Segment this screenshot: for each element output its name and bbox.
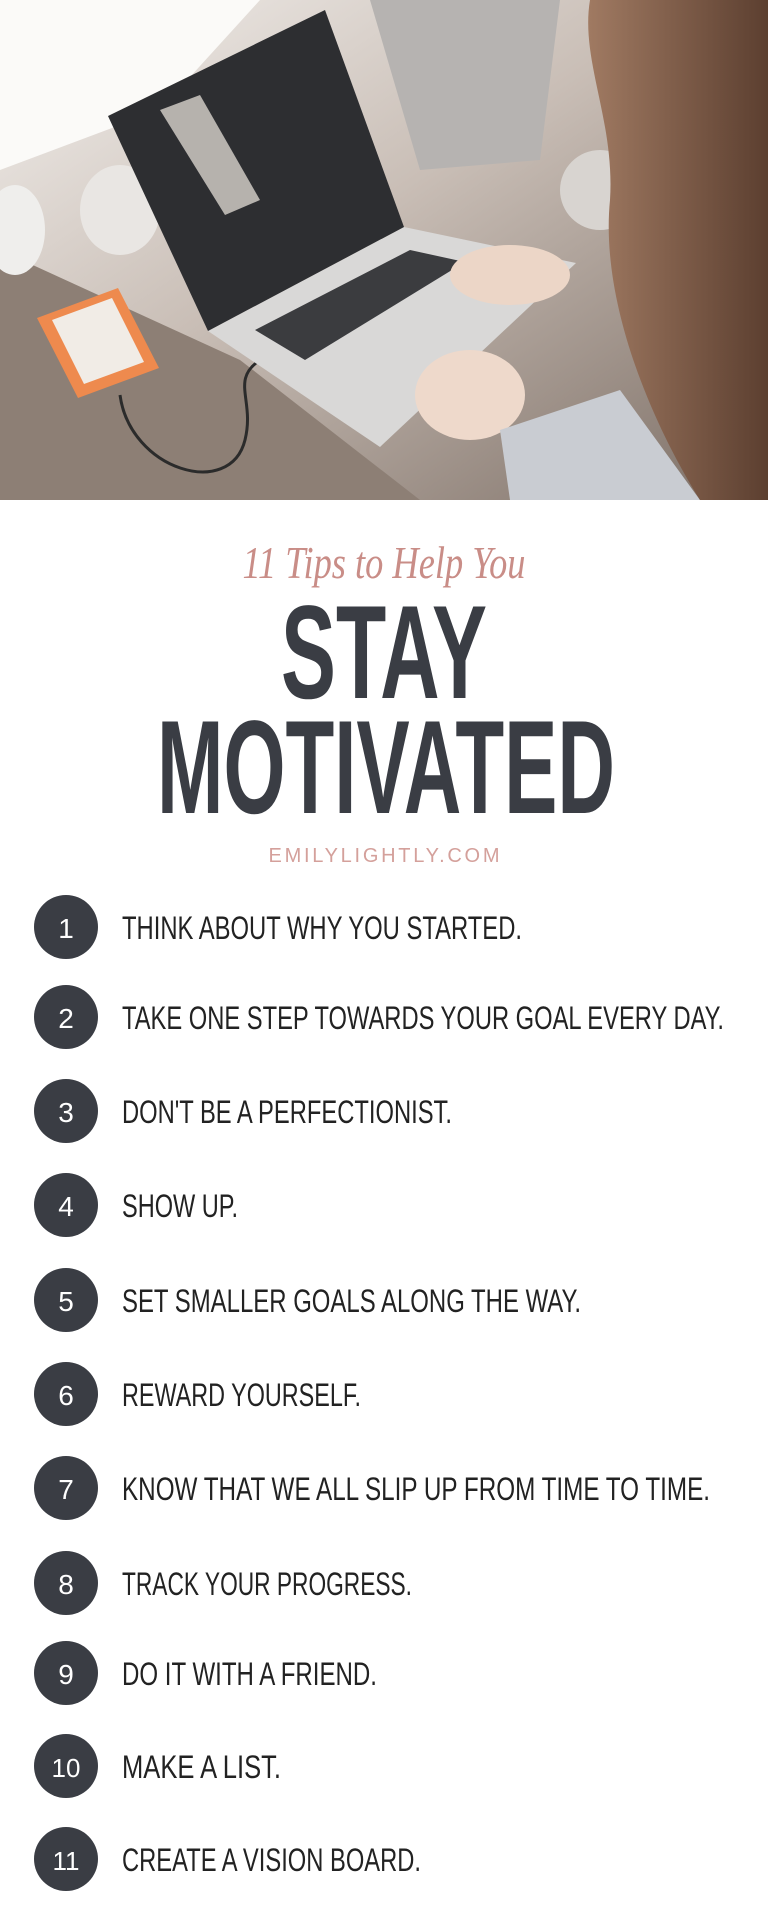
hair	[588, 0, 768, 500]
orange hard drive	[37, 288, 159, 398]
tip 5	[34, 1268, 581, 1332]
tip 10: 10	[52, 1753, 80, 1783]
tip 4: SHOW UP.	[122, 1188, 238, 1224]
tip 1: 1	[58, 913, 74, 944]
tip 7: 7	[58, 1474, 74, 1505]
tip 9	[34, 1641, 377, 1705]
tip 2	[34, 985, 724, 1049]
tip 8	[34, 1551, 412, 1615]
tip 11	[34, 1827, 421, 1891]
tip 3	[34, 1079, 452, 1143]
tip 6	[34, 1362, 361, 1426]
tip 6: REWARD YOURSELF.	[122, 1377, 361, 1413]
tip 5: 5	[58, 1286, 74, 1317]
laptop base	[208, 227, 576, 447]
tip 4: 4	[58, 1191, 74, 1222]
table	[0, 250, 420, 500]
tip 4	[34, 1173, 238, 1237]
cups	[0, 185, 45, 275]
tip 10	[34, 1734, 281, 1798]
cable	[120, 360, 260, 472]
website: EMILYLIGHTLY.COM	[268, 845, 500, 867]
window glare	[0, 0, 260, 170]
tip 1	[34, 895, 522, 959]
tip 8: TRACK YOUR PROGRESS.	[122, 1566, 412, 1602]
tips list	[34, 895, 724, 1891]
tip 3: 3	[58, 1097, 74, 1128]
tip 11: CREATE A VISION BOARD.	[122, 1842, 421, 1878]
tip 5: SET SMALLER GOALS ALONG THE WAY.	[122, 1283, 581, 1319]
tip 1: THINK ABOUT WHY YOU STARTED.	[122, 910, 522, 946]
tip 3: DON'T BE A PERFECTIONIST.	[122, 1094, 452, 1130]
photo: laptop on desk	[0, 0, 768, 500]
tip 7	[34, 1456, 710, 1520]
tip 9: DO IT WITH A FRIEND.	[122, 1656, 377, 1692]
tip 2: 2	[58, 1003, 74, 1034]
hands	[450, 245, 570, 305]
tip 11: 11	[52, 1846, 80, 1876]
tip 10: MAKE A LIST.	[122, 1749, 281, 1785]
bag	[370, 0, 560, 170]
tip 9: 9	[58, 1659, 74, 1690]
tip 6: 6	[58, 1380, 74, 1411]
laptop screen	[108, 10, 404, 331]
tip 8: 8	[58, 1569, 74, 1600]
script subtitle: 11 Tips to Help You	[242, 537, 526, 588]
title: STAY MOTIVATED	[157, 590, 615, 820]
sleeve	[500, 390, 700, 500]
